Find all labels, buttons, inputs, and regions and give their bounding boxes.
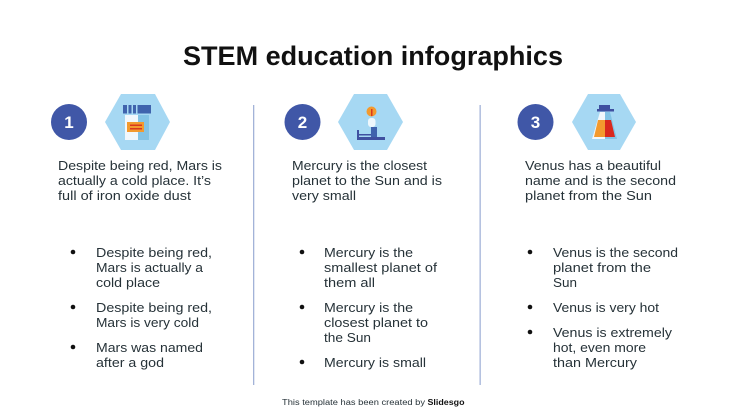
bullet list 2: Mercury is the [324, 245, 413, 260]
bullet list 3: Venus is the second [553, 245, 678, 260]
number badge 3 [518, 104, 554, 140]
bullet list 2: Mercury is small [324, 355, 426, 370]
icon: specimen bottle in hexagon [105, 94, 170, 150]
description 2: very small [292, 188, 356, 203]
description 1: actually a cold place. It’s [58, 173, 212, 188]
icon: burner in hexagon [338, 94, 403, 150]
bullet list 2: them all [324, 275, 375, 290]
number badge 2 [284, 104, 320, 140]
description 2 [292, 158, 443, 203]
description 3: Venus has a beautiful [525, 158, 661, 173]
description 2: planet to the Sun and is [292, 173, 443, 188]
bullet list 3: hot, even more [553, 340, 646, 355]
footer credit [282, 398, 465, 407]
icon: flask in hexagon [572, 94, 636, 150]
bullet list 1 [71, 245, 212, 370]
footer credit: Slidesgo [428, 398, 465, 407]
bullet list 1: Despite being red, [96, 245, 212, 260]
bullet list 3: Venus is extremely [553, 325, 673, 340]
bullet list 3: than Mercury [553, 355, 638, 370]
title: STEM education infographics [183, 41, 563, 71]
panel: column 3 [518, 94, 678, 370]
footer credit: This template has been created by [282, 398, 425, 407]
bullet list 2: closest planet to [324, 315, 428, 330]
description 2: Mercury is the closest [292, 158, 427, 173]
bullet list 1: after a god [96, 355, 164, 370]
number badge 1: 1 [64, 113, 74, 132]
bullet list 2 [300, 245, 437, 370]
description 3 [525, 158, 676, 203]
bullet list 3: planet from the [553, 260, 651, 275]
number badge 2: 2 [298, 113, 307, 132]
bullet list 1: cold place [96, 275, 160, 290]
bullet list 1: Despite being red, [96, 300, 212, 315]
bullet list 1: Mars is actually a [96, 260, 204, 275]
bullet list 1: Mars is very cold [96, 315, 199, 330]
description 3: planet from the Sun [525, 188, 652, 203]
number badge 3: 3 [531, 113, 540, 132]
description 1: full of iron oxide dust [58, 188, 191, 203]
panel: column 2 [284, 94, 443, 370]
panel: column 1 [51, 94, 223, 370]
bullet list 3 [528, 245, 678, 370]
bullet list 2: smallest planet of [324, 260, 437, 275]
bullet list 3: Sun [553, 275, 577, 290]
bullet list 3: Venus is very hot [553, 300, 659, 315]
description 1 [58, 158, 223, 203]
bullet list 2: the Sun [324, 330, 371, 345]
number badge 1 [51, 104, 87, 140]
bullet list 2: Mercury is the [324, 300, 413, 315]
bullet list 1: Mars was named [96, 340, 203, 355]
description 3: name and is the second [525, 173, 676, 188]
description 1: Despite being red, Mars is [58, 158, 223, 173]
